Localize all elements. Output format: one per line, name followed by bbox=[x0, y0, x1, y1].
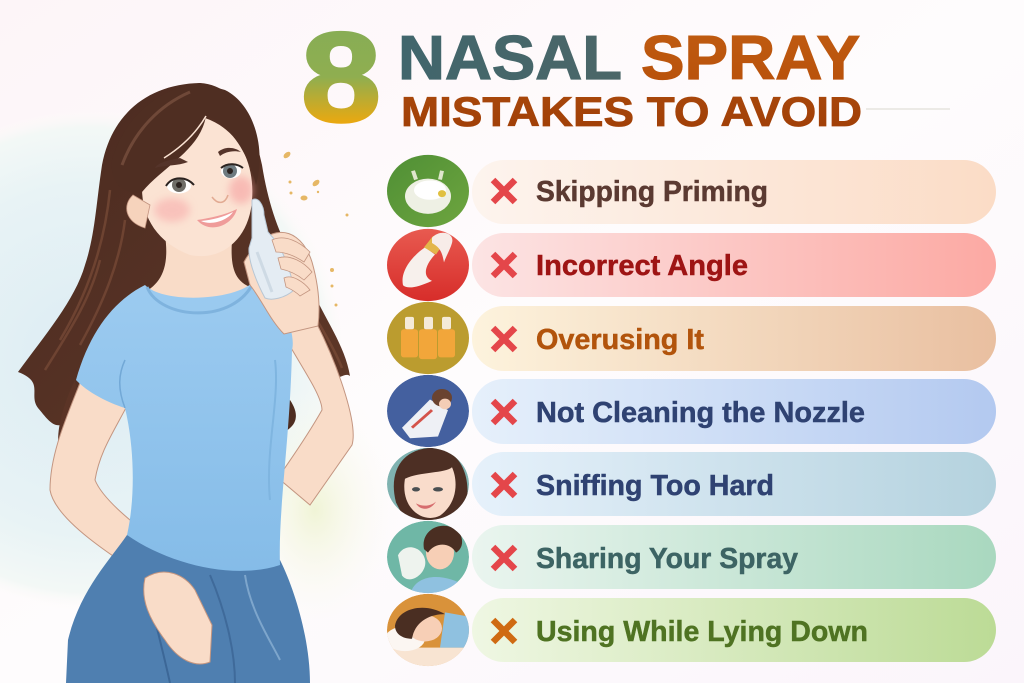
jeans bbox=[66, 535, 310, 683]
pill: skipping priming bbox=[472, 160, 996, 224]
hair lower right strands bbox=[258, 400, 296, 438]
pill: not cleaning the nozzle bbox=[472, 379, 996, 444]
title bbox=[301, 6, 862, 148]
mistake row 5: sniffing too hard bbox=[387, 448, 996, 520]
illustration: smiling woman using nasal spray bbox=[18, 83, 353, 683]
icon: man portrait on teal bbox=[387, 521, 469, 599]
cheeks bbox=[154, 198, 190, 222]
decorative paint flecks bbox=[282, 151, 348, 306]
mistake row 3: overusing it bbox=[387, 302, 996, 374]
fingers bbox=[272, 238, 312, 296]
label: Not Cleaning the Nozzle bbox=[536, 397, 865, 429]
pill: sharing your spray bbox=[472, 525, 996, 589]
t-shirt bbox=[76, 280, 293, 571]
heading word: SPRAY: SPRAY bbox=[641, 24, 860, 93]
label: Overusing It bbox=[536, 324, 704, 356]
label: Sharing Your Spray bbox=[536, 543, 798, 575]
mistake row 2: incorrect angle bbox=[387, 229, 996, 301]
pill: using while lying down bbox=[472, 598, 996, 662]
left arm bbox=[50, 370, 185, 590]
hand on jeans bbox=[144, 572, 212, 664]
nose and mouth bbox=[212, 195, 228, 202]
label: Using While Lying Down bbox=[536, 616, 868, 648]
raised arm bbox=[278, 322, 353, 505]
nasal spray bottle bbox=[249, 199, 294, 299]
label: Sniffing Too Hard bbox=[536, 470, 774, 502]
icon: spray bottle on red bbox=[387, 229, 469, 301]
mistake row 4: not cleaning the nozzle bbox=[387, 375, 996, 447]
icon: red cross bbox=[493, 401, 515, 423]
eyes and brows bbox=[155, 158, 188, 168]
heading line: mistakes to avoid: MISTAKES TO AVOID bbox=[401, 88, 862, 135]
big number 8: 8 bbox=[301, 6, 381, 148]
mistake row 6: sharing your spray bbox=[387, 521, 996, 599]
hand behind bottle bbox=[244, 232, 319, 334]
label: Skipping Priming bbox=[536, 176, 768, 208]
pill: sniffing too hard bbox=[472, 452, 996, 516]
mistake row 1: skipping priming bbox=[387, 155, 996, 227]
mistake row 7: using while lying down bbox=[385, 594, 996, 667]
hair lower left strands bbox=[58, 380, 80, 450]
icon: red cross bbox=[493, 254, 515, 276]
icon: woman's face portrait bbox=[387, 448, 469, 520]
icon: three orange bottles bbox=[387, 302, 469, 374]
hair highlights bbox=[45, 190, 342, 370]
pill: incorrect angle bbox=[472, 233, 996, 297]
icon: red cross bbox=[493, 328, 515, 350]
ear bbox=[127, 195, 150, 228]
icon: red cross bbox=[493, 180, 515, 202]
icon: red cross bbox=[493, 474, 515, 496]
hair fringe bbox=[112, 83, 260, 192]
back hair bbox=[18, 83, 350, 425]
face bbox=[142, 118, 252, 256]
pill: overusing it bbox=[472, 306, 996, 371]
label: Incorrect Angle bbox=[536, 250, 748, 282]
icon: person with blanket on blue bbox=[387, 375, 469, 447]
neck and chest bbox=[140, 235, 260, 326]
icon: person lying on pillow bbox=[385, 594, 470, 667]
icon: red cross bbox=[493, 547, 515, 569]
icon: nasal spray jar on green bbox=[387, 155, 469, 227]
icon: orange cross bbox=[493, 620, 515, 642]
heading word: NASAL: NASAL bbox=[398, 24, 622, 93]
